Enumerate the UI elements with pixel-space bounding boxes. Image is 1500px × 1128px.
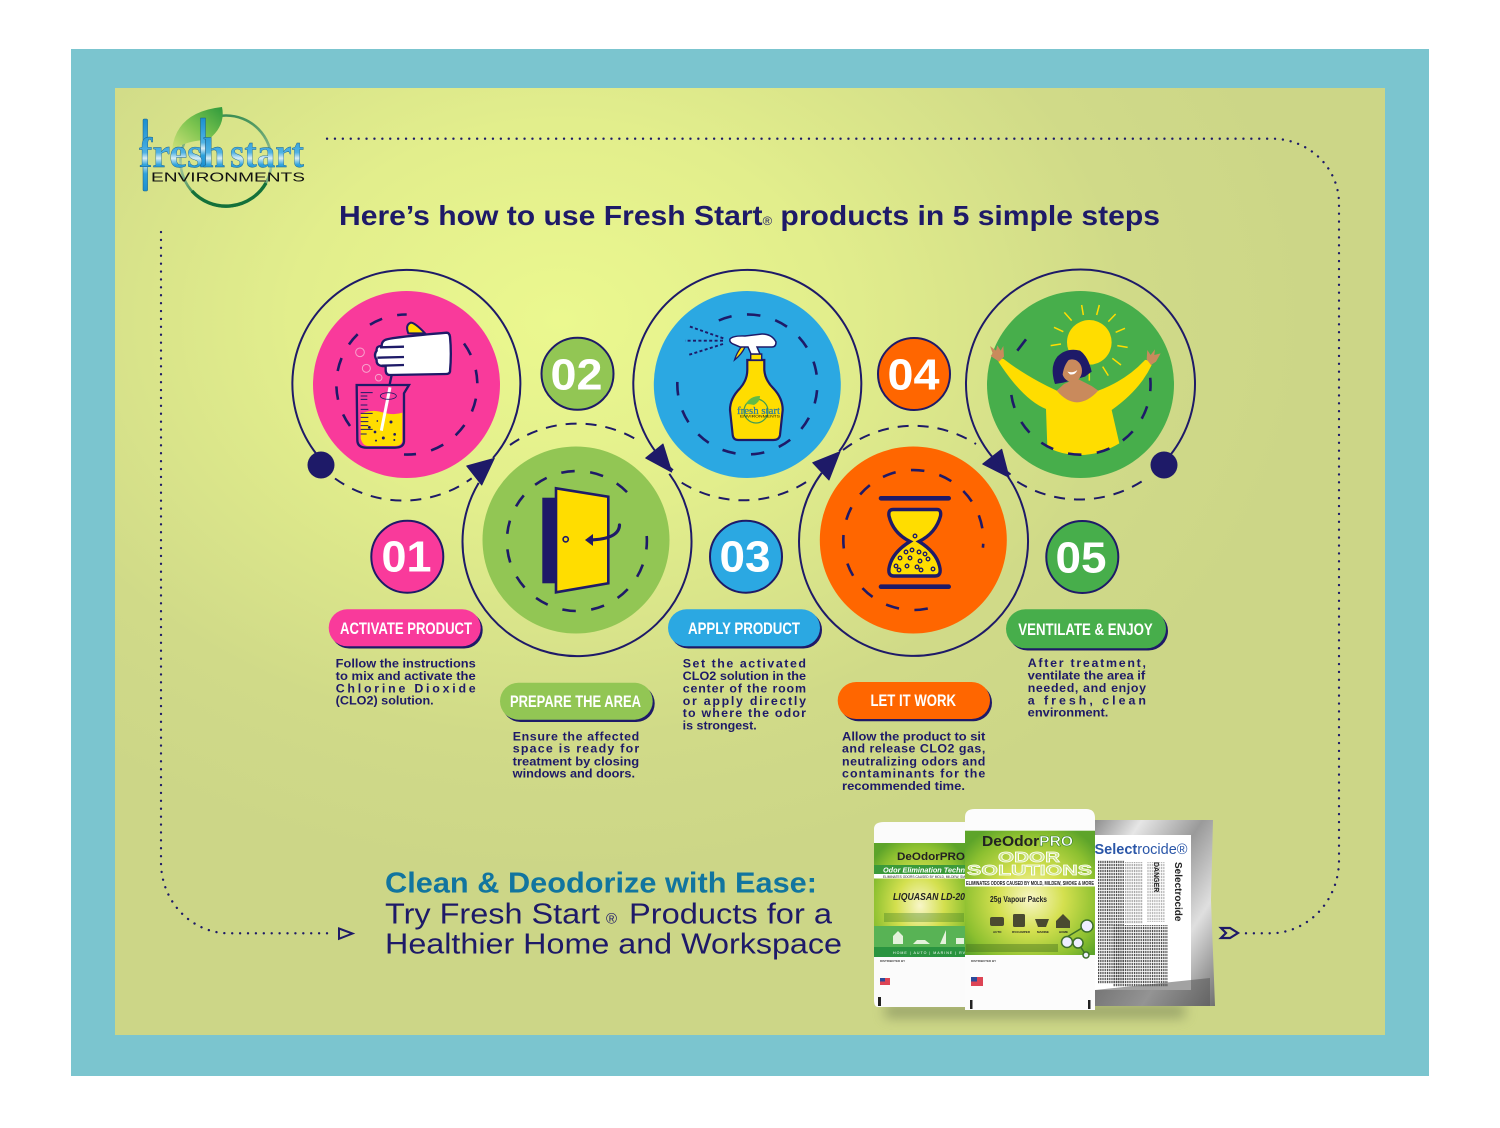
pack: DeOdorPRO Odor Solutions: DISTRIBUTED BY [971,959,996,963]
description: treatment by closing [513,754,639,768]
pack: Selectrocide: DANGER [1152,862,1159,892]
number badge 02 [542,338,614,410]
description: contaminants for the [842,767,985,781]
number badge 01 [371,521,443,593]
description: Set the activated [683,656,806,670]
product icons [990,914,1070,928]
description: neutralizing odors and [842,754,985,768]
logo ring [180,116,272,206]
description: CLO2 solution in the [683,669,806,683]
number badge 04 [878,338,950,410]
description: to mix and activate the [336,669,476,683]
logo wordmark [139,118,305,191]
description: space is ready for [513,742,639,756]
mini logo on bottle: ENVIRONMENTS [740,414,781,418]
description [336,656,476,708]
blue circle [654,291,841,478]
description [1028,656,1146,720]
pack: LIQUASAN LD-20: Odor Elimination Techn [883,866,965,874]
description: needed, and enjoy [1028,681,1146,695]
product packs [874,809,1215,1018]
logo subtitle: ENVIRONMENTS [151,170,305,184]
pack: Selectrocide: Selectrocide [1172,862,1183,922]
pack: LIQUASAN LD-20: DeOdorPRO [897,851,965,863]
number badge 01: 01 [382,533,432,582]
pack: DeOdorPRO Odor Solutions: RV/CAMPER [1012,930,1031,934]
dark green circle [987,291,1174,478]
pack: DeOdorPRO Odor Solutions: AUTO [993,930,1002,934]
flag [880,978,890,985]
pack: LIQUASAN LD-20: LIQUASAN LD-20 [893,892,965,903]
pill: apply product [668,609,822,648]
pill: let it work: LET IT WORK [870,692,956,710]
dashed inner ring [1011,378,1151,455]
pack: DeOdorPRO Odor Solutions: MARINE [1037,930,1049,934]
icon: spray bottle [685,326,783,440]
flag [971,977,983,986]
description: Follow the instructions [336,656,476,670]
pack: LIQUASAN LD-20: HOME | AUTO | MARINE | RV [893,951,966,955]
description: Chlorine Dioxide [336,681,476,695]
icon: woman and sun [990,305,1161,455]
pill: ventilate and enjoy [1006,609,1168,650]
molecule [1062,920,1093,958]
arrow to step 3 [646,444,672,472]
description: to where the odor [683,706,806,720]
ring [463,474,692,656]
call to action line 2: Healthier Home and Workspace [385,928,842,960]
description: or apply directly [683,694,806,708]
call to action line 1: Try Fresh Start [385,898,600,930]
number badge 03: 03 [720,533,770,582]
call to action line 1: ® [606,910,617,927]
dotted path: top and right [327,139,1339,933]
pack shadow [885,1004,1185,1018]
icon: hand and beaker [356,323,451,448]
logo wordmark: start [230,129,305,176]
ring [633,270,861,470]
number badge 03 [710,521,782,593]
step 4: let it work [799,338,1028,793]
call to action line 1 [385,898,832,930]
pink circle [313,291,500,478]
description: (CLO2) solution. [336,694,434,708]
arrow to step 4 [813,452,840,480]
dotted path: left [161,232,334,933]
pack: DeOdorPRO Odor Solutions: ODOR [998,849,1060,866]
lime background panel [115,88,1385,1035]
number badge 05: 05 [1056,533,1106,582]
pill: activate product: ACTIVATE PRODUCT [340,620,472,638]
pack: Selectrocide: Selectrocide® [1094,842,1188,858]
step 2: prepare the area [463,338,692,781]
description [512,729,639,781]
arrow: outlined triangle [339,928,352,939]
pack: DeOdorPRO Odor Solutions [965,809,1095,1010]
pack: DeOdorPRO Odor Solutions: HOME [1059,930,1068,934]
pack: DeOdorPRO Odor Solutions: 25g Vapour Packs [990,895,1048,904]
mini logo on bottle: fresh start [737,406,780,417]
icon: hourglass [881,498,949,587]
logo: Fresh Start Environments [139,107,305,206]
pack: LIQUASAN LD-20 [874,822,966,1007]
pack: LIQUASAN LD-20: DISTRIBUTED BY [880,959,905,963]
number badge 05 [1046,521,1118,593]
description: environment. [1028,706,1108,720]
description: Allow the product to sit [842,729,985,743]
logo leaf [172,107,223,150]
pill: prepare the area: PREPARE THE AREA [510,693,641,711]
pill: apply product: APPLY PRODUCT [688,620,800,638]
arrow: double chevron right [1221,928,1238,938]
ring [292,270,520,462]
description: recommended time. [842,779,965,793]
orange circle [820,446,1007,634]
description: is strongest. [683,719,757,733]
description: a fresh, clean [1028,693,1146,707]
description: center of the room [683,681,806,695]
pill: prepare the area [500,683,655,722]
description: windows and doors. [512,767,635,781]
pill: activate product [329,609,483,648]
description: Ensure the affected [513,729,639,743]
arrow to step 5 [983,449,1009,477]
call to action line 1: Products for a [629,898,832,930]
call to action [385,868,842,960]
call to action heading: Clean & Deodorize with Ease: [385,868,817,900]
number badge 02: 02 [550,350,602,399]
end dot [1150,452,1178,478]
pack: DeOdorPRO Odor Solutions: ELIMINATES ODORS CAUSED BY MOLD, MILDEW, SMOKE & MORE [966,881,1095,887]
pack: LIQUASAN LD-20: ELIMINATES ODORS CAUSED BY MOLD, MILDEW, SM [883,875,965,879]
logo wordmark: fresh [139,129,225,176]
step 1: activate product [292,270,520,708]
pack: DeOdorPRO Odor Solutions: SOLUTIONS [967,862,1092,879]
arrow to step 2 [467,458,494,485]
description: ventilate the area if [1028,668,1146,682]
start dot [308,452,334,478]
number badge 04: 04 [888,350,940,399]
pack: Selectrocide [1093,820,1215,1006]
description [683,656,806,733]
pill: ventilate and enjoy: VENTILATE & ENJOY [1018,621,1153,639]
ring [799,473,1028,656]
pack: DeOdorPRO Odor Solutions: DeOdor PRO [982,834,1073,850]
ring [966,269,1195,475]
icon: door [542,488,620,592]
description: After treatment, [1028,656,1146,670]
step 5: ventilate and enjoy [966,269,1195,720]
title: Here’s how to use Fresh Start ® products in 5 simple steps [339,200,1160,231]
pill: let it work [838,682,992,721]
step 3: apply product [633,270,861,733]
green circle [482,446,670,634]
mini logo on bottle [737,396,781,423]
description [842,729,985,793]
description: and release CLO2 gas, [842,742,985,756]
